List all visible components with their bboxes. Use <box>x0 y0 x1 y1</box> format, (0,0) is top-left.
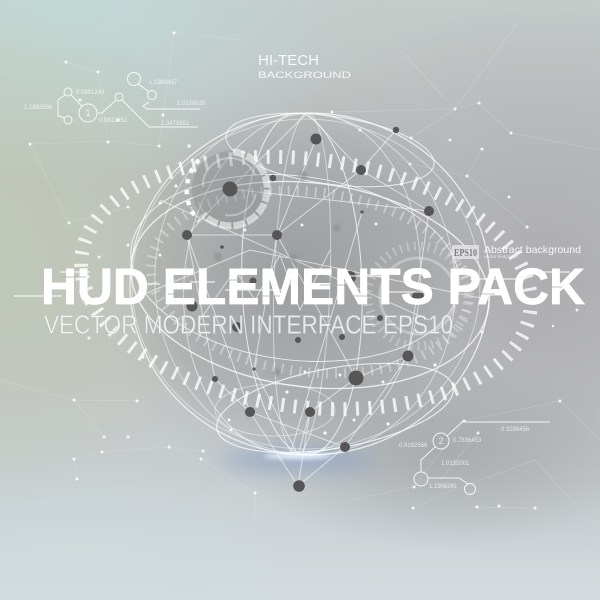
HUD ring (right of globe, behind title) <box>368 246 468 346</box>
HUD callout 2 (bottom right): 2 <box>438 436 444 446</box>
blue glow under the globe <box>220 451 376 469</box>
heading: HI-TECH BACKGROUND <box>258 52 351 81</box>
wireframe globe <box>119 98 501 486</box>
HUD callout 2 (bottom right): 1.1908261 <box>429 484 458 490</box>
HUD callout 1 (top left): 1.1983457 <box>149 80 178 86</box>
HUD callout 2 (bottom right): 0.7836453 <box>453 438 482 444</box>
badge: EPS10 Abstract background: Abstract background <box>484 244 581 256</box>
faint grey nodes <box>214 172 340 376</box>
globe shading <box>130 113 490 455</box>
heading: HI-TECH BACKGROUND: BACKGROUND <box>258 70 351 81</box>
badge: EPS10 Abstract background: vector illustration <box>484 254 518 259</box>
HUD callout 2 (bottom right): 0.9182566 <box>399 443 428 449</box>
badge: EPS10 Abstract background: EPS10 <box>454 248 477 259</box>
HUD callout 1 (top left): 0.9812652 <box>99 118 128 124</box>
badge: EPS10 Abstract background <box>452 244 581 259</box>
HUD callout 1 (top left): 1.1892956 <box>24 105 53 111</box>
HUD callout 2 (bottom right): 1.0135001 <box>441 461 470 467</box>
white nodes on the globe <box>158 128 484 435</box>
HUD callout 2 (bottom right): 0.3298456 <box>501 427 530 433</box>
subtitle: VECTOR MODERN INTERFACE EPS10 <box>44 310 453 340</box>
HUD callout 2 (bottom right) <box>399 422 550 494</box>
HUD callout 1 (top left): 1.3478651 <box>161 121 190 127</box>
title: HUD ELEMENTS PACK: HUD ELEMENTS PACK <box>41 258 585 315</box>
dashed HUD ring: outer ellipse <box>67 132 545 434</box>
background constellation dots <box>28 32 578 510</box>
HUD callout 1 (top left) <box>24 72 206 127</box>
dark nodes on the globe <box>182 127 434 492</box>
HUD callout 1 (top left): 1.0128639 <box>177 101 206 107</box>
HUD eye target (upper left of globe) <box>187 151 268 227</box>
HUD callout 1 (top left): 1 <box>85 108 91 118</box>
inner HUD ring <box>140 173 480 391</box>
heading: HI-TECH BACKGROUND: HI-TECH <box>258 52 319 69</box>
HUD callout 1 (top left): 0.0981243 <box>76 90 105 96</box>
